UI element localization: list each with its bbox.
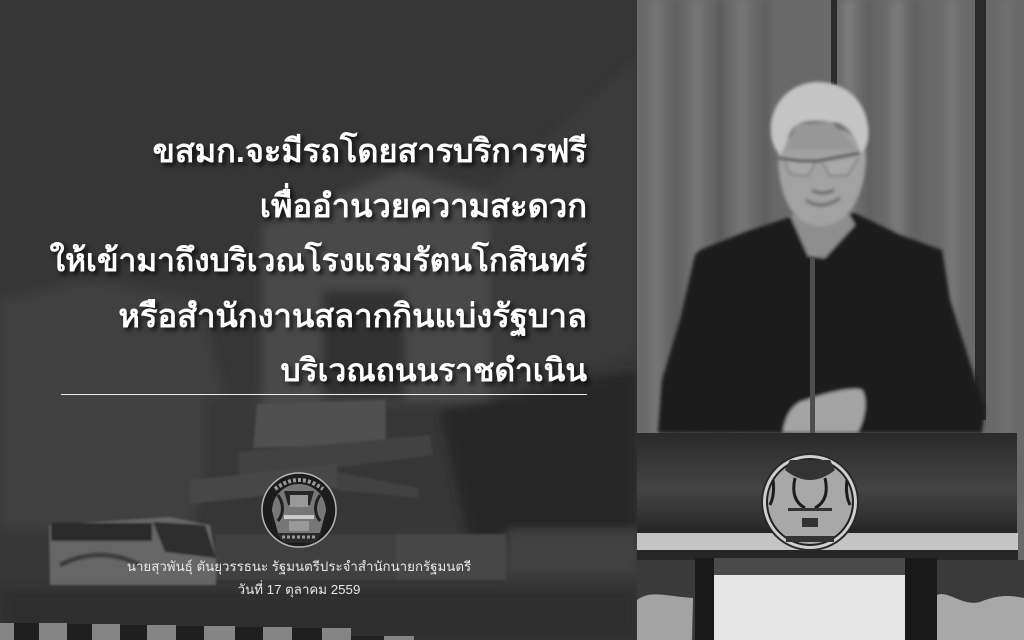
icon: podium seal (762, 454, 858, 550)
nose and mouth (806, 190, 840, 205)
headline line 2: เพื่ออำนวยความสะดวก (260, 187, 587, 224)
face (778, 127, 866, 226)
headline line 3: ให้เข้ามาถึงบริเวณโรงแรมรัตนโกสินทร์ (50, 242, 587, 278)
caption: date: วันที่ 17 ตุลาคม 2559 (238, 582, 360, 597)
underline (61, 394, 587, 395)
podium (637, 433, 1024, 640)
speaker (658, 82, 985, 433)
caption: speaker name and title: นายสุวพันธุ์ ตันยุวรรธนะ รัฐมนตรีประจำสำนักนายกรัฐมนตรี (127, 559, 471, 574)
headline (50, 132, 591, 388)
hands (783, 389, 865, 432)
icon: government seal (261, 472, 337, 548)
headline line 4: หรือสำนักงานสลากกินแบ่งรัฐบาล (118, 297, 587, 334)
neck (790, 212, 855, 258)
headline line 1: ขสมก.จะมีรถโดยสารบริการฟรี (153, 133, 587, 169)
jacket (658, 213, 985, 433)
headline line 5: บริเวณถนนราชดำเนิน (280, 352, 587, 388)
hair (771, 82, 868, 155)
background photo: hotel street scene (0, 172, 637, 640)
road kerb stripes (14, 623, 384, 640)
forehead (786, 122, 858, 150)
glasses (778, 153, 860, 161)
microphone (810, 258, 815, 433)
curtain (637, 0, 1024, 640)
